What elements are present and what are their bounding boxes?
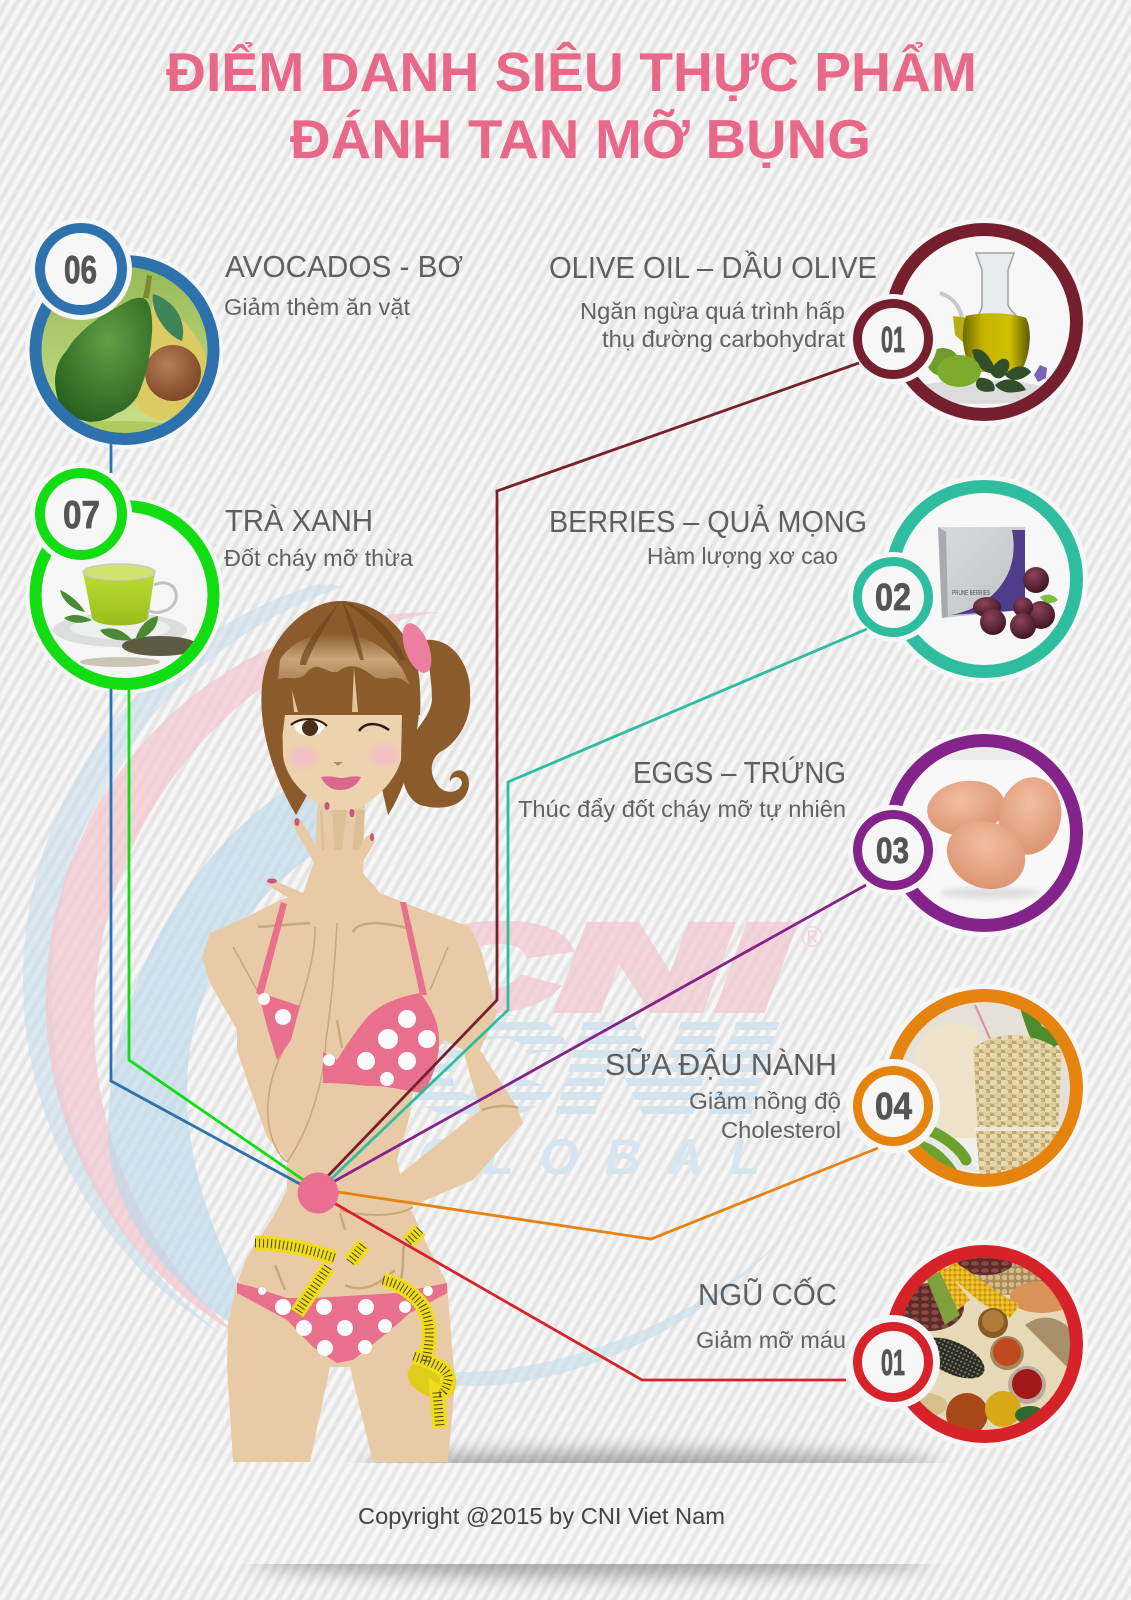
hair front and fringe [261, 601, 420, 815]
watermark wordmark: CNI striped blue: CNI [405, 991, 775, 1143]
number badge 02 [848, 552, 938, 642]
text: soy milk: SỮA ĐẬU NÀNH [605, 1047, 837, 1082]
food image: green tea [53, 563, 194, 667]
text: eggs: Thúc đẩy đốt cháy mỡ tự nhiên [518, 796, 846, 822]
copyright footer: Copyright @2015 by CNI Viet Nam [358, 1503, 725, 1529]
bikini bottom [237, 1283, 447, 1363]
text: berries: Hàm lượng xơ cao [647, 543, 838, 569]
panel: soy milk [846, 984, 1088, 1192]
ring [892, 1252, 1076, 1436]
panel: cereals [846, 1240, 1088, 1448]
watermark text: GLOBAL: GLOBAL [418, 1129, 760, 1185]
watermark arc: lower blue [450, 1240, 780, 1386]
number badge 07: 07 [63, 494, 100, 537]
body skin silhouette [202, 800, 523, 1462]
text: soy milk: Cholesterol [721, 1117, 841, 1143]
hair back and ponytail [261, 601, 470, 815]
panel: olive oil [848, 218, 1088, 426]
watermark arc: wide blue crescent [108, 770, 320, 1335]
text: olive oil: Ngăn ngừa quá trình hấp [580, 298, 845, 324]
panel: green tea [26, 463, 224, 694]
title: ĐIỂM DANH SIÊU THỰC PHẨM [166, 41, 977, 103]
waist hub dot [298, 1172, 338, 1214]
food image: prune berries box: PRUNE BERRIES [952, 590, 990, 597]
text: olive oil: thụ đường carbohydrat [602, 326, 846, 352]
measuring tape [255, 1230, 456, 1428]
ring [892, 740, 1076, 926]
text: avocados [224, 249, 463, 320]
number badge 01 [846, 1315, 940, 1409]
food image: prune berries box [938, 527, 1058, 639]
number badge 04: 04 [875, 1086, 912, 1128]
text: eggs: EGGS – TRỨNG [633, 755, 846, 790]
illustration: woman with measuring tape [202, 601, 523, 1462]
watermark wordmark: CNI pink: CNI [400, 902, 787, 1034]
facial features [289, 719, 398, 790]
text: green tea [224, 503, 413, 571]
body contour lines [233, 923, 518, 1290]
bottom shadows [250, 1451, 940, 1576]
text: cereals: Giảm mỡ máu [696, 1327, 846, 1353]
line: olive oil [326, 363, 859, 1178]
food image: olive oil [925, 252, 1047, 404]
text: olive oil [549, 250, 877, 352]
number badge 06 [30, 218, 132, 320]
ring [892, 486, 1076, 672]
text: green tea: TRÀ XANH [225, 503, 373, 538]
watermark arc: thin blue [23, 584, 345, 1335]
line: eggs [333, 885, 866, 1182]
thumb [266, 878, 303, 905]
panel: avocados [26, 218, 224, 449]
neck shadow and fingers [267, 802, 374, 884]
text: avocados: Giảm thèm ăn vặt [224, 294, 411, 320]
face [282, 712, 402, 811]
bikini top [256, 902, 439, 1093]
watermark registered mark: ® [801, 921, 823, 954]
title: ĐÁNH TAN MỠ BỤNG [290, 108, 871, 170]
food image: soy milk and beans [903, 1002, 1070, 1174]
number badge 06: 06 [64, 249, 97, 292]
text: cereals [696, 1276, 846, 1353]
ring [892, 230, 1076, 414]
watermark arc: pink crescent [46, 612, 438, 1335]
number badge 03 [848, 805, 938, 895]
number badge 04 [846, 1059, 940, 1153]
text: berries: BERRIES – QUẢ MỌNG [549, 504, 867, 539]
connector lines [111, 363, 878, 1380]
text: eggs [518, 755, 846, 822]
panel: berries [848, 475, 1088, 683]
text: olive oil: OLIVE OIL – DẦU OLIVE [549, 250, 877, 285]
title [166, 41, 977, 170]
hair scrunchie [397, 619, 437, 677]
food image: avocado [42, 267, 208, 433]
text: green tea: Đốt cháy mỡ thừa [224, 545, 413, 571]
ring [36, 261, 214, 439]
text: cereals: NGŨ CỐC [698, 1276, 837, 1312]
text: soy milk: Giảm nồng độ [689, 1088, 841, 1114]
number badge 07 [30, 463, 132, 565]
text: avocados: AVOCADOS - BƠ [225, 249, 463, 284]
panel: eggs [848, 729, 1088, 937]
line: green tea [129, 689, 305, 1181]
background watermark: CNI Global logo [23, 584, 823, 1386]
number badge 02: 02 [875, 577, 911, 619]
footer light band [150, 1463, 970, 1564]
text: soy milk [605, 1047, 841, 1143]
food image: eggs [927, 747, 1062, 900]
number badge 01 [848, 294, 938, 384]
number badge 01: 01 [881, 1342, 905, 1383]
line: soy [338, 1148, 878, 1239]
line: avocados [111, 444, 300, 1184]
text: berries [549, 504, 867, 569]
number badge 01: 01 [881, 319, 905, 360]
ring [892, 996, 1076, 1180]
line: berries [330, 629, 867, 1180]
line: cereals [334, 1203, 846, 1380]
number badge 03: 03 [876, 830, 909, 871]
ring [36, 506, 214, 684]
food image: cereals and spices [902, 1258, 1070, 1430]
